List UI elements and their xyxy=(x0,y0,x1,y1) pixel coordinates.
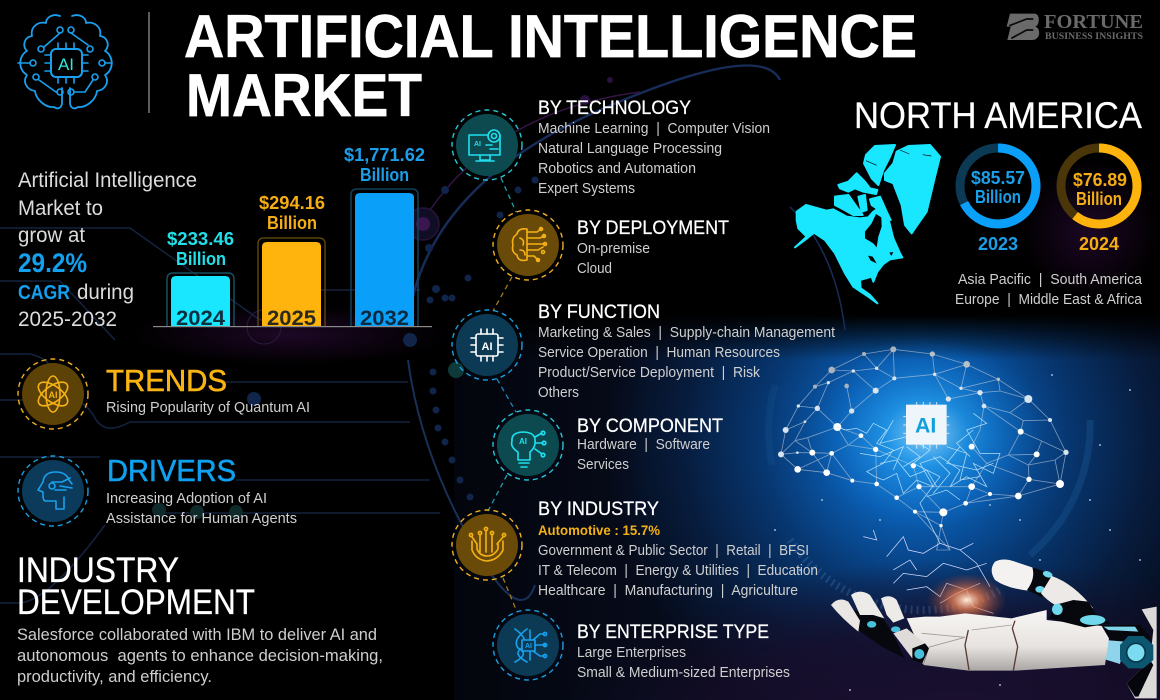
panel: by industry: IT & Telecom | Energy & Utilities | Education xyxy=(538,562,818,579)
text block: growth summary: 2025-2032 xyxy=(18,308,117,331)
title: MARKET xyxy=(186,62,422,129)
icon: AI head xyxy=(18,456,88,526)
icon: AI chip: AI xyxy=(915,414,936,438)
wrist xyxy=(1127,607,1157,698)
chart: 2024 donut xyxy=(1061,148,1137,254)
panel: industry development: Salesforce collaborated with IBM to deliver AI and xyxy=(17,625,377,644)
panel: by deployment xyxy=(493,210,729,280)
panel: industry development: autonomous agents to enhance decision-making, xyxy=(17,646,383,665)
panel: by enterprise type: BY ENTERPRISE TYPE xyxy=(577,621,769,643)
bar chart: market size xyxy=(153,144,432,330)
palm xyxy=(907,610,1109,671)
icon: AI brain circuit logo xyxy=(18,15,112,108)
icon: atom AI: AI xyxy=(48,390,58,400)
bar: 2032: 2032 xyxy=(360,307,409,330)
icon: DNA AI xyxy=(493,610,563,680)
panel: drivers: Increasing Adoption of AI xyxy=(106,490,267,507)
panel: by enterprise type xyxy=(493,610,790,681)
panel: by component: Services xyxy=(577,456,629,473)
bar: 2024 xyxy=(167,228,234,330)
logo: Fortune Business Insights xyxy=(1007,11,1143,41)
panel: by industry: Government & Public Sector | Retail | BFSI xyxy=(538,542,809,559)
icon: monitor with gear xyxy=(452,110,522,180)
text block: other regions: Asia Pacific | South America xyxy=(958,271,1143,288)
logo: Fortune Business Insights: BUSINESS INSIGHTS xyxy=(1045,31,1143,41)
panel: by technology xyxy=(452,97,770,197)
panel: by deployment: Cloud xyxy=(577,260,612,277)
divider xyxy=(148,12,150,113)
icon: brain circuit xyxy=(493,210,563,280)
bar: 2025 xyxy=(258,192,325,330)
icon: FB mark xyxy=(1007,14,1039,40)
icon: AI chip xyxy=(903,402,949,449)
text block: other regions xyxy=(955,271,1143,308)
text block: growth summary: 29.2% xyxy=(18,248,87,278)
icon: DNA AI: AI xyxy=(525,643,532,650)
icon: monitor with gear: AI xyxy=(474,141,481,148)
chart: 2024 donut: 2024 xyxy=(1079,234,1119,254)
bar: 2032: Billion xyxy=(360,164,409,185)
heading: north america: NORTH AMERICA xyxy=(854,95,1142,136)
panel: trends: TRENDS xyxy=(106,363,227,398)
illustration: robot hand xyxy=(831,559,1157,698)
text block: other regions: Europe | Middle East & Africa xyxy=(955,291,1143,308)
icon: AI chip xyxy=(452,310,522,380)
panel: by deployment: On-premise xyxy=(577,240,650,257)
bar: 2024: $233.46 xyxy=(167,228,234,249)
icon: gear circuit xyxy=(452,510,522,580)
bar: 2025: 2025 xyxy=(267,307,316,330)
text block: growth summary: grow at xyxy=(18,224,85,247)
bar: 2024: 2024 xyxy=(176,307,225,330)
panel: trends xyxy=(18,359,310,429)
title xyxy=(184,3,917,129)
bar: 2025: $294.16 xyxy=(259,192,325,213)
panel: drivers: DRIVERS xyxy=(107,453,236,488)
panel: industry development: DEVELOPMENT xyxy=(17,583,255,622)
text block: growth summary: during xyxy=(77,281,134,304)
chart: 2023 donut: Billion xyxy=(975,186,1021,207)
panel: by technology: Natural Language Processing xyxy=(538,140,722,157)
panel: industry development xyxy=(17,551,383,686)
bar: 2025: Billion xyxy=(267,212,317,233)
title: ARTIFICIAL INTELLIGENCE xyxy=(184,3,917,70)
text block: growth summary: CAGR xyxy=(18,282,70,304)
panel: by function: BY FUNCTION xyxy=(538,301,660,323)
chart: 2023 donut xyxy=(960,148,1036,254)
panel: by component: Hardware | Software xyxy=(577,436,710,453)
panel: by industry: Automotive : 15.7% xyxy=(538,522,661,538)
bar: 2024: Billion xyxy=(176,248,226,269)
map: north america xyxy=(795,145,940,303)
panel: by industry: BY INDUSTRY xyxy=(538,498,659,520)
logo: Fortune Business Insights: FORTUNE xyxy=(1044,11,1143,33)
panel: by technology: BY TECHNOLOGY xyxy=(538,97,691,119)
connectors between segment icons xyxy=(488,178,517,612)
panel: drivers: Assistance for Human Agents xyxy=(106,510,297,527)
panel: by function: Others xyxy=(538,384,579,401)
panel: by component: BY COMPONENT xyxy=(577,415,723,437)
chart: 2024 donut: $76.89 xyxy=(1073,169,1127,190)
chart: 2024 donut: Billion xyxy=(1076,188,1122,209)
panel: brain and robot hand image background xyxy=(454,315,1160,700)
panel: by technology: Robotics and Automation xyxy=(538,160,696,177)
panel: by enterprise type: Small & Medium-sized Enterprises xyxy=(577,664,790,681)
thumb xyxy=(992,559,1036,591)
text block: growth summary xyxy=(18,169,197,331)
decorative circuit lines xyxy=(0,65,1160,603)
panel: by function xyxy=(452,301,836,401)
panel: by function: Marketing & Sales | Supply-chain Management xyxy=(538,324,836,341)
panel: by technology: Expert Systems xyxy=(538,180,635,197)
text block: growth summary: Artificial Intelligence xyxy=(18,169,197,192)
illustration: neural network brain xyxy=(778,337,1069,627)
panel: trends: Rising Popularity of Quantum AI xyxy=(106,399,310,416)
panel: by function: Service Operation | Human Resources xyxy=(538,344,780,361)
icon: AI chip: AI xyxy=(482,341,492,353)
fingers xyxy=(845,608,905,658)
panel: by function: Product/Service Deployment | Risk xyxy=(538,364,760,381)
bar: 2032: $1,771.62 xyxy=(344,144,425,165)
panel: industry development: productivity, and efficiency. xyxy=(17,667,212,686)
panel: by industry xyxy=(452,498,818,599)
panel: by deployment: BY DEPLOYMENT xyxy=(577,217,729,239)
icon: AI light bulb: AI xyxy=(519,437,527,446)
panel: by industry: Healthcare | Manufacturing | Agriculture xyxy=(538,582,798,599)
icon label: AI: AI xyxy=(58,55,74,74)
panel: by enterprise type: Large Enterprises xyxy=(577,644,686,661)
text block: growth summary: Market to xyxy=(18,197,103,220)
chart: 2023 donut: 2023 xyxy=(978,234,1018,254)
panel: by technology: Machine Learning | Computer Vision xyxy=(538,120,770,137)
bar: 2032 xyxy=(344,144,425,330)
panel: drivers xyxy=(18,453,297,527)
icon: atom AI xyxy=(18,359,88,429)
icon: AI light bulb xyxy=(493,410,563,480)
panel: industry development: INDUSTRY xyxy=(17,551,179,590)
chart: 2023 donut: $85.57 xyxy=(971,167,1025,188)
panel: by component xyxy=(493,410,723,480)
